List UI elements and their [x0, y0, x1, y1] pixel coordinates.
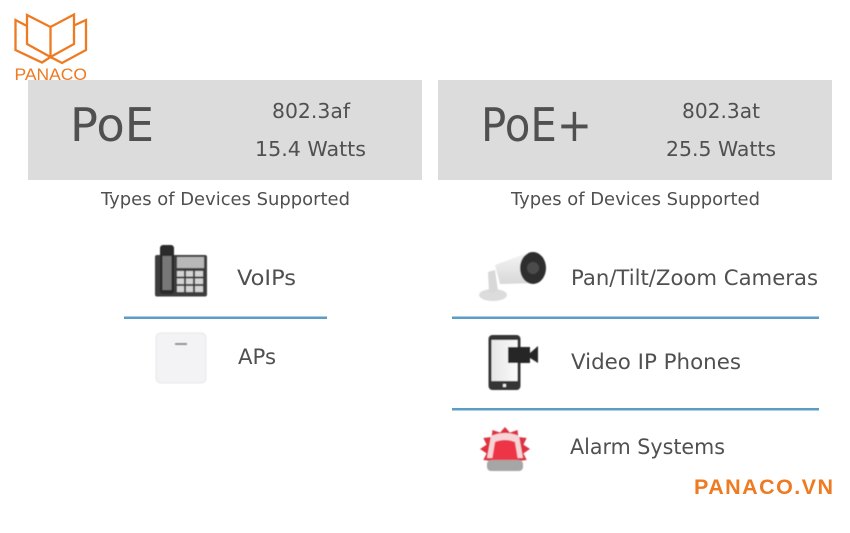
watermark: PANACO.VN: PANACO.VN: [694, 475, 833, 499]
text: 25.5 Watts: 25.5 Watts: [666, 137, 776, 161]
icon: desk phone: [155, 245, 207, 296]
text: 802.3af: 802.3af: [272, 99, 351, 123]
label: Video IP Phones: Video IP Phones: [571, 350, 741, 375]
icon: video phone: [488, 335, 538, 390]
label: APs: APs: [238, 345, 276, 370]
heading: PoE: PoE: [70, 98, 154, 152]
icon: access point: [156, 333, 206, 383]
subheading: PoE+ devices: Types of Devices Supported: [510, 189, 760, 210]
text: 802.3at: 802.3at: [682, 99, 760, 123]
icon: alarm light: [480, 427, 530, 471]
subheading: PoE devices: Types of Devices Supported: [100, 189, 350, 210]
panel: PoE+ header: [438, 80, 832, 180]
panel: PoE header: [28, 80, 422, 180]
label: Pan/Tilt/Zoom Cameras: Pan/Tilt/Zoom Cameras: [571, 266, 818, 291]
logo: PANACO: [14, 14, 87, 84]
heading: PoE+: PoE+: [481, 98, 592, 152]
icon: open book logo: [16, 14, 86, 63]
icon: security camera: [479, 252, 546, 301]
text: 15.4 Watts: 15.4 Watts: [255, 137, 366, 161]
label: VoIPs: VoIPs: [237, 266, 296, 291]
label: Alarm Systems: Alarm Systems: [570, 435, 725, 460]
logo wordmark: PANACO: [14, 66, 87, 84]
